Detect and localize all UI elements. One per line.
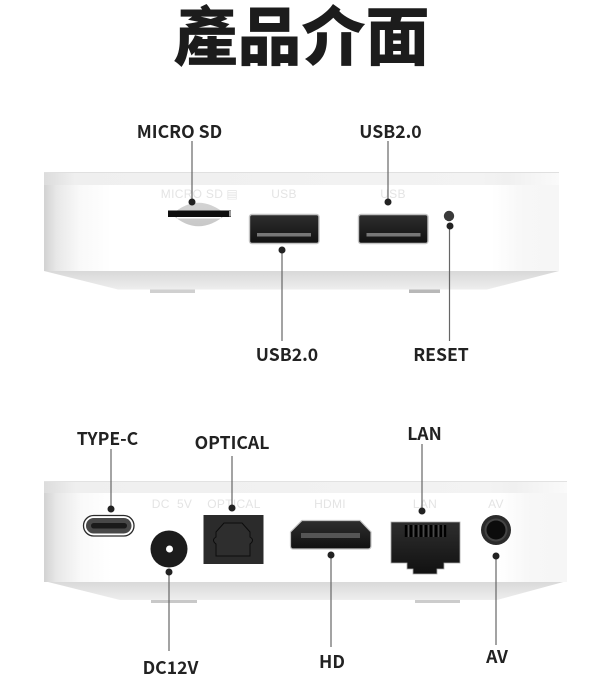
callout: RESET: RESET xyxy=(413,342,469,367)
callout: RESET xyxy=(413,222,469,367)
callout: HD: HD xyxy=(319,649,345,674)
callout: USB2.0 bottom xyxy=(256,246,318,367)
printed port names: DC 5V xyxy=(152,497,192,511)
port: micro SD slot xyxy=(168,203,231,226)
port: optical xyxy=(204,515,264,564)
printed port names: MICRO SD xyxy=(161,187,223,201)
callout: DC12V xyxy=(143,568,198,680)
port: LAN xyxy=(391,522,460,574)
panel: bottom device rear view xyxy=(44,481,567,603)
printed port names: HDMI xyxy=(314,497,346,511)
callout: USB2.0 top xyxy=(359,119,422,206)
port: reset hole xyxy=(444,211,454,221)
port: AV jack xyxy=(481,515,511,545)
callout: LAN xyxy=(407,421,442,514)
printed port names: USB xyxy=(380,187,406,201)
callout: LAN: LAN xyxy=(407,421,442,446)
port: Type-C xyxy=(84,516,134,536)
callout: OPTICAL: OPTICAL xyxy=(195,430,269,455)
callout: DC12V: DC12V xyxy=(143,655,198,680)
printed port names xyxy=(161,187,406,201)
port: DC jack xyxy=(150,530,188,568)
printed port names: LAN xyxy=(413,497,437,511)
printed port names: AV xyxy=(488,497,504,511)
callout: MICRO SD xyxy=(137,119,222,206)
port: HDMI xyxy=(290,520,371,549)
port: USB left xyxy=(250,214,319,244)
callout: TYPE-C: TYPE-C xyxy=(77,426,139,451)
device body xyxy=(44,172,559,293)
panel: top device rear view xyxy=(44,172,559,293)
callout: HD xyxy=(319,552,345,674)
callout: USB2.0 top: USB2.0 xyxy=(359,119,422,144)
callout: OPTICAL xyxy=(195,430,269,512)
printed port names xyxy=(152,497,504,511)
callout: AV: AV xyxy=(485,644,508,669)
callout: USB2.0 bottom: USB2.0 xyxy=(256,342,318,367)
port: USB right xyxy=(358,214,428,244)
printed port names: USB xyxy=(271,187,297,201)
printed port names: ▤ xyxy=(226,187,238,201)
callout: TYPE-C xyxy=(77,426,139,512)
callout: AV xyxy=(485,552,508,669)
device body xyxy=(44,481,567,603)
callout: MICRO SD: MICRO SD xyxy=(137,119,222,144)
printed port names: OPTICAL xyxy=(207,497,261,511)
